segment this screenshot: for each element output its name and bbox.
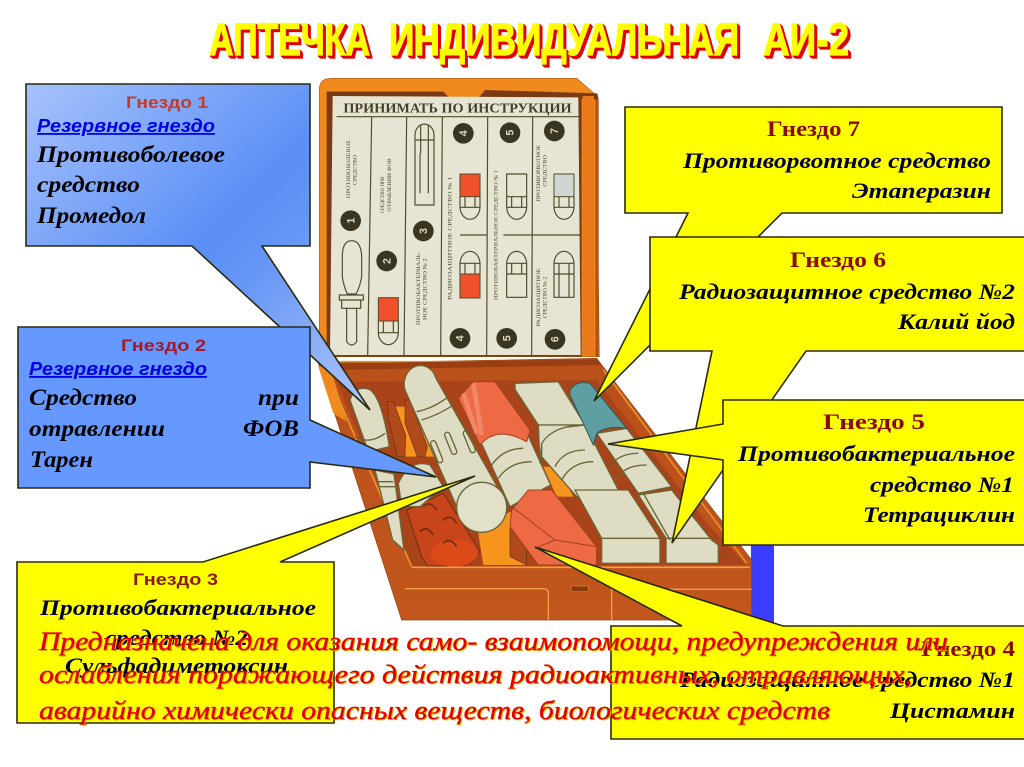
sheet captions: ПРОТИВОРВОТНОЕ [536, 145, 542, 202]
callout: slot 6: Калий йод [897, 309, 1015, 334]
numbered circles: 7 [549, 128, 561, 134]
container 4: upper red prism and cylinder [480, 425, 551, 507]
callout: slot 4 [535, 547, 1024, 739]
purpose text overlay [38, 627, 948, 725]
callout: slot 3: средство №2 [105, 625, 248, 650]
callout: slot 2: при [258, 385, 299, 410]
callout: slot 7: Этаперазин [852, 178, 991, 203]
purpose text overlay: ослабления поражающего действия радиоактивных, отравляющих, [39, 660, 912, 689]
callout: slot 2: Резервное гнездо [29, 359, 207, 379]
callout: slot 1 [26, 84, 370, 410]
callout: slot 1: Резервное гнездо [37, 116, 215, 136]
container 1: syringe tube [350, 388, 389, 452]
numbered circles: 6 [550, 336, 562, 342]
purpose text overlay: аварийно химически опасных веществ, биологических средств [39, 696, 830, 725]
container 5: prism and cylinder [542, 425, 618, 497]
side partitions [387, 400, 527, 565]
numbered circles: 5 [505, 130, 517, 136]
callout: slot 5: Противобактериальное [737, 441, 1015, 466]
sheet captions: СРЕДСТВО № 2 [543, 276, 549, 318]
illustration: first aid kit [318, 78, 752, 620]
callout: slot 7 [594, 107, 1002, 401]
callout: slot 6: Гнездо 6 [790, 247, 886, 272]
instruction sheet heading: ПРИНИМАТЬ ПО ИНСТРУКЦИИ [343, 102, 572, 117]
callout: slot 2: Средство [29, 385, 137, 410]
container 3: large cylinder [404, 365, 507, 523]
title: ИНДИВИДУАЛЬНАЯ [389, 14, 739, 65]
callout: slot 5: Тетрациклин [863, 502, 1015, 527]
blue side bar [751, 545, 774, 623]
callout: slot 2: Тарен [30, 447, 93, 472]
numbered circles: 1 [345, 218, 357, 224]
numbered circles: 4 [455, 335, 467, 341]
callout: slot 6: Радиозащитное средство №2 [678, 279, 1015, 304]
numbered circles: 4 [458, 130, 470, 136]
callout: slot 3: Сульфадиметоксин [65, 653, 288, 678]
callout: slot 7: Противорвотное средство [682, 148, 991, 173]
callout: slot 2: отравлении [29, 416, 165, 441]
tray body [318, 358, 752, 620]
callout: slot 4: Гнездо 4 [921, 636, 1015, 661]
callout: slot 4: Цистамин [889, 698, 1015, 723]
sheet captions: ОТРАВЛЕНИИ ФОВ [387, 158, 393, 212]
container 6: teal cap and cylinder [597, 428, 672, 493]
callout: slot 3: Гнездо 3 [133, 570, 218, 589]
callout: slot 1: Гнездо 1 [126, 93, 208, 112]
sheet captions: РАДИОЗАЩИТНОЕ СРЕДСТВО № 1 [448, 176, 454, 300]
callout: slot 2: Гнездо 2 [121, 336, 206, 355]
container 4: lower red prism [510, 490, 597, 565]
callout: slot 5: средство №1 [870, 472, 1014, 497]
sheet captions: СРЕДСТВО [543, 155, 549, 187]
sheet captions [346, 140, 549, 327]
numbered circles: 2 [381, 258, 393, 264]
front wall lines [412, 565, 750, 570]
callout: slot 2 [18, 327, 436, 488]
sheet captions: ПРОТИВОБОЛЕВОЕ [346, 140, 352, 198]
container 2: red tube [407, 493, 479, 566]
callout: slot 5: Гнездо 5 [823, 409, 925, 434]
sheet captions: НОЕ СРЕДСТВО № 2 [423, 258, 429, 320]
callout: slot 4: Радиозащитное средство №1 [679, 667, 1015, 692]
callout: slot 1: Противоболевое [36, 142, 225, 167]
callout: slot 3 [17, 476, 475, 723]
callout: slot 5 [608, 400, 1024, 545]
sheet captions: ПРОТИВОБАКТЕРИАЛЬ- [416, 251, 422, 325]
callout: slot 1: средство [37, 172, 140, 197]
numbered circles: 3 [418, 228, 430, 234]
callout: slot 6 [650, 237, 1024, 543]
sheet captions: РАДИОЗАЩИТНОЕ [536, 268, 542, 327]
sheet drug diagrams [339, 124, 574, 345]
title: АПТЕЧКА [209, 14, 370, 65]
numbered circles [340, 121, 565, 350]
sheet captions: ПРОТИВОБАКТЕРИАЛЬНОЕ СРЕДСТВО № 1 [493, 170, 499, 300]
callout: slot 1: Промедол [36, 203, 146, 228]
title: АИ-2 [763, 14, 849, 65]
sheet captions: СРЕДСТВО [353, 155, 359, 185]
callout: slot 3: Противобактериальное [39, 595, 316, 620]
title [209, 14, 849, 65]
front pale boxes [575, 490, 660, 563]
numbered circles: 5 [501, 335, 513, 341]
purpose text overlay: Предназначена для оказания само- взаимопомощи, предупреждения или [38, 627, 948, 656]
sheet captions: СРЕДСТВО ПРИ [380, 177, 386, 213]
kit tray with drug containers [318, 358, 752, 620]
callout: slot 2: ФОВ [243, 416, 299, 441]
kit lid with instruction sheet [319, 78, 599, 357]
callout: slot 7: Гнездо 7 [767, 116, 860, 141]
